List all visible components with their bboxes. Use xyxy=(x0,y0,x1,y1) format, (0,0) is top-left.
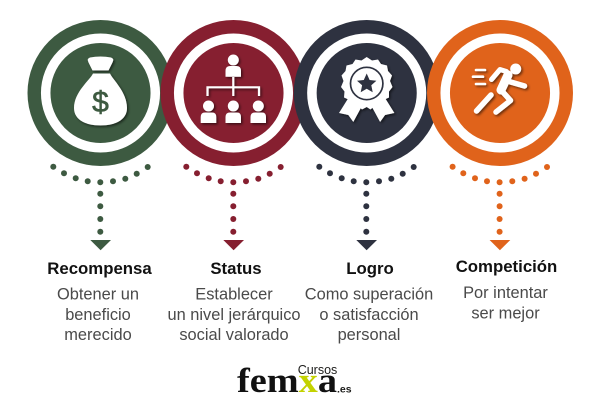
icon: running figure xyxy=(473,64,524,112)
description: merecido xyxy=(64,326,132,344)
heading: Recompensa xyxy=(47,259,152,278)
description: Como superación xyxy=(305,286,433,304)
arrow xyxy=(490,240,510,250)
arrow xyxy=(90,240,111,250)
description: Por intentar xyxy=(463,284,548,302)
description: ser mejor xyxy=(471,304,540,322)
description: o satisfacción xyxy=(319,306,419,324)
icon: award rosette xyxy=(339,57,394,122)
red ring badge xyxy=(160,20,306,166)
heading: Status xyxy=(210,259,262,278)
logo: Cursos femxa.es: .es xyxy=(337,384,352,396)
logo: Cursos femxa.es: Cursos xyxy=(298,363,337,377)
panel: competición xyxy=(427,20,573,322)
dotted connector xyxy=(50,164,151,235)
dotted connector xyxy=(183,164,284,235)
navy ring badge xyxy=(294,20,440,166)
panel: recompensa xyxy=(28,20,174,344)
icon: money bag: $ xyxy=(92,86,109,119)
logo: Cursos femxa.es: femxa xyxy=(237,361,337,400)
heading: Logro xyxy=(346,259,394,278)
arrow xyxy=(223,240,244,250)
arrow xyxy=(356,240,377,250)
panel: status xyxy=(160,20,306,344)
description: Obtener un xyxy=(57,286,139,304)
description: Establecer xyxy=(195,286,273,304)
dotted connector xyxy=(316,164,417,235)
description: beneficio xyxy=(65,306,131,324)
dotted connector xyxy=(450,164,550,235)
heading: Competición xyxy=(456,257,557,276)
description: social valorado xyxy=(179,326,289,344)
panel: logro xyxy=(294,20,440,344)
icon: money bag xyxy=(74,56,127,126)
description: un nivel jerárquico xyxy=(167,306,301,324)
icon: organisation chart xyxy=(201,54,266,123)
description: personal xyxy=(338,326,400,344)
green ring badge xyxy=(28,20,174,166)
orange ring badge xyxy=(427,20,573,166)
